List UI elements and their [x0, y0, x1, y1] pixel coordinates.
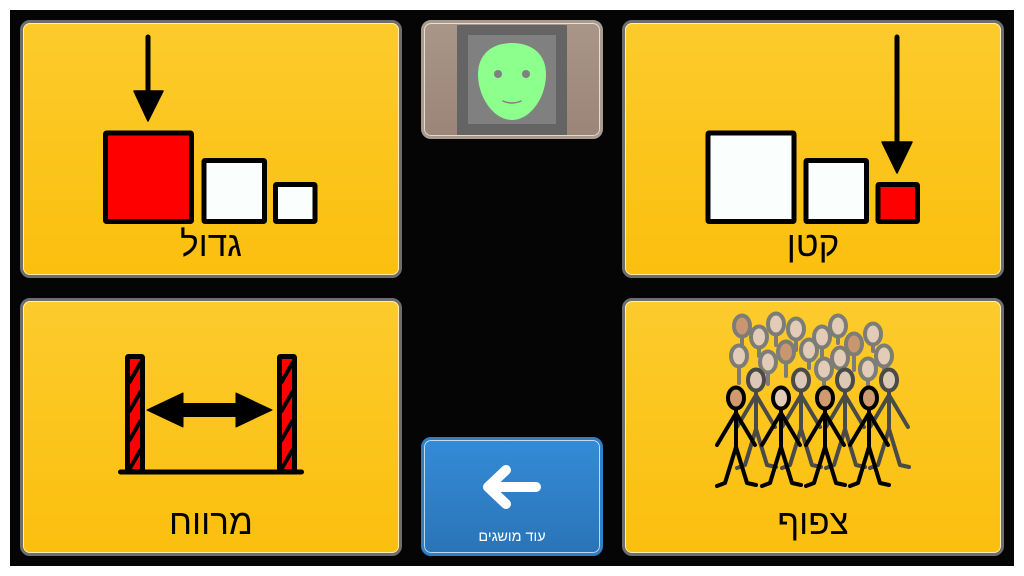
label: spacious: מרווח	[169, 503, 253, 542]
label: more concepts: עוד מושגים	[478, 529, 546, 545]
panel: more concepts button	[421, 437, 603, 556]
icon: crowd of people	[717, 314, 909, 486]
icon: big squares with arrow	[106, 37, 315, 222]
panel: face symbol button	[421, 20, 603, 139]
label: big: גדול	[180, 225, 242, 264]
icon: back arrow	[488, 470, 536, 504]
label: small: קטן	[787, 225, 839, 264]
icon: two posts with double arrow	[120, 356, 302, 472]
label: crowded: צפוף	[777, 503, 849, 542]
panel: small (top right)	[622, 20, 1004, 278]
icon: small squares with arrow	[708, 37, 918, 222]
panel: big (top left)	[20, 20, 402, 278]
panel: crowded (bottom right)	[622, 298, 1004, 556]
icon: green face	[457, 25, 567, 135]
panel: spacious (bottom left)	[20, 298, 402, 556]
